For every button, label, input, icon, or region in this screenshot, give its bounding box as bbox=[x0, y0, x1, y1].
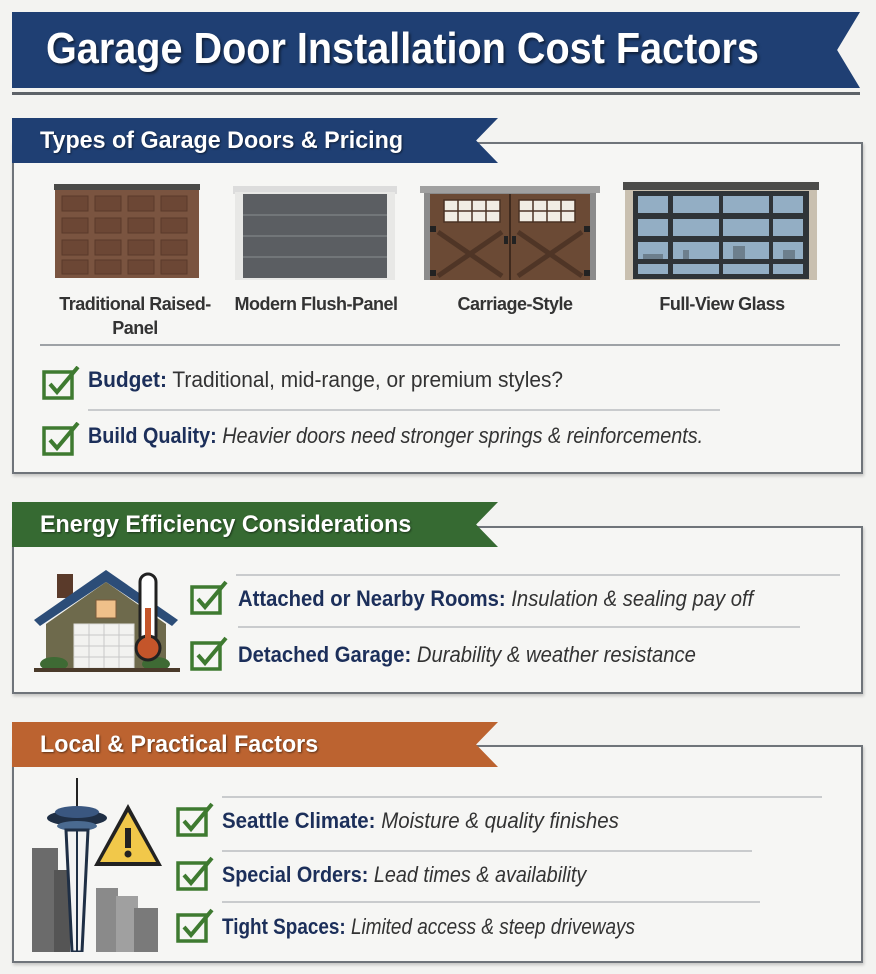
icon: house with thermometer bbox=[34, 570, 180, 672]
checklist item: detached garage bbox=[190, 636, 696, 671]
title banner bbox=[12, 12, 860, 88]
heading: local & practical factors: Local & Practical Factors bbox=[40, 731, 318, 758]
checklist item: seattle climate bbox=[176, 802, 619, 837]
icon: modern flush-panel door bbox=[233, 186, 397, 280]
heading: types of garage doors bbox=[12, 118, 498, 163]
heading: energy efficiency: Energy Efficiency Considerations bbox=[40, 511, 411, 538]
icon: traditional raised-panel door bbox=[54, 184, 200, 278]
checklist item: attached rooms bbox=[190, 580, 755, 615]
panel: types of garage doors bbox=[12, 142, 863, 474]
icon: full-view glass door bbox=[623, 182, 819, 280]
checklist item: special orders bbox=[176, 856, 588, 891]
heading: energy efficiency bbox=[12, 502, 498, 547]
door labels: Panel bbox=[112, 318, 158, 338]
door labels: Full-View Glass bbox=[659, 294, 785, 314]
checklist item: attached rooms: Attached or Nearby Rooms: Insulation & sealing pay off bbox=[238, 586, 753, 611]
heading: types of garage doors: Types of Garage Doors & Pricing bbox=[40, 127, 403, 154]
door labels bbox=[59, 294, 785, 338]
panel: energy efficiency bbox=[12, 526, 863, 694]
checklist item: tight spaces bbox=[176, 908, 635, 943]
checklist item: build quality: Build Quality: Heavier doors need stronger springs & reinforcements. bbox=[88, 423, 703, 448]
checklist item: budget bbox=[42, 366, 563, 400]
checklist item: budget: Budget: Traditional, mid-range, or premium styles? bbox=[88, 367, 563, 392]
door labels: Carriage-Style bbox=[457, 294, 573, 314]
checklist item: detached garage: Detached Garage: Durability & weather resistance bbox=[238, 642, 696, 667]
checklist item: special orders: Special Orders: Lead times & availability bbox=[222, 862, 586, 887]
heading: local & practical factors bbox=[12, 722, 498, 767]
icon: space needle skyline with warning bbox=[32, 778, 162, 952]
door labels: Modern Flush-Panel bbox=[234, 294, 398, 314]
title banner: Garage Door Installation Cost Factors bbox=[46, 24, 759, 73]
checklist item: build quality bbox=[42, 422, 703, 456]
panel: local & practical factors bbox=[12, 745, 863, 963]
icon: carriage-style door bbox=[420, 186, 600, 280]
checklist item: seattle climate: Seattle Climate: Moisture & quality finishes bbox=[222, 808, 619, 833]
checklist item: tight spaces: Tight Spaces: Limited access & steep driveways bbox=[222, 914, 635, 939]
door labels: Traditional Raised- bbox=[59, 294, 211, 314]
